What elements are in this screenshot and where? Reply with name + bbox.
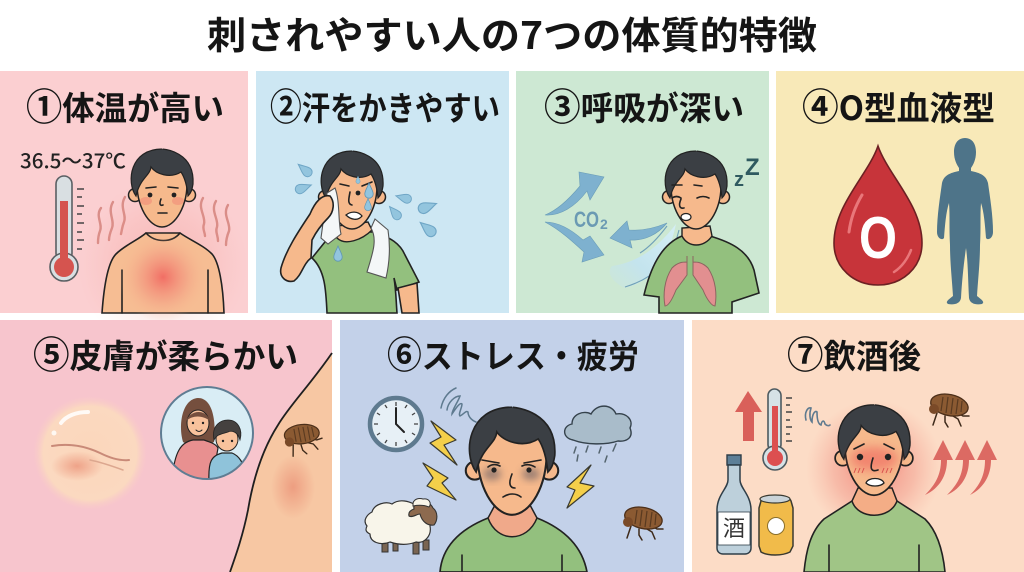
scribble xyxy=(805,408,830,426)
panel: 3 deep breathing xyxy=(516,71,769,313)
panel: 5 soft skin xyxy=(0,320,332,572)
heading 6: ⑥ストレス・疲労 xyxy=(387,325,639,379)
icon: rain cloud xyxy=(565,406,631,462)
arm with flea xyxy=(230,353,332,572)
glow behind torso xyxy=(78,180,248,350)
heading 2: ②汗をかきやすい xyxy=(270,77,500,131)
CO2 subscript: 2 xyxy=(600,216,608,232)
icon: sake bottle: 酒 xyxy=(723,516,745,541)
person flushed xyxy=(804,405,945,572)
panel: 7 after drinking xyxy=(692,320,1024,572)
heading 1: ①体温が高い xyxy=(26,77,224,131)
icon: lightning xyxy=(423,463,456,500)
silhouette xyxy=(937,138,993,304)
icon: blood drop xyxy=(834,146,922,285)
temperature label: 36.5〜37℃ xyxy=(20,145,126,174)
soft skin closeup xyxy=(33,396,147,510)
icon: sake bottle xyxy=(717,455,751,554)
heading 3: ③呼吸が深い xyxy=(544,77,744,131)
person sleeping xyxy=(644,151,759,313)
rising heat arrows xyxy=(925,440,997,495)
panel: 4 blood type O xyxy=(776,71,1024,313)
icon: lightning xyxy=(430,421,457,465)
flying sweat drops xyxy=(294,161,438,239)
neck towel xyxy=(367,219,389,278)
icon: sheep xyxy=(365,499,437,554)
icon: zZ: z xyxy=(734,169,744,191)
icon: thermometer xyxy=(763,389,792,470)
icon: flea xyxy=(929,391,970,427)
panel: 6 stress and fatigue xyxy=(340,320,684,572)
icon: lightning xyxy=(567,465,594,508)
icon: mother and child xyxy=(161,387,253,482)
heading 7: ⑦飲酒後 xyxy=(787,325,921,379)
breath arrows xyxy=(545,172,667,262)
icon: up arrow xyxy=(735,391,762,441)
icon: big Z: Z xyxy=(745,154,760,181)
title: 刺されやすい人の7つの体質的特徴 xyxy=(207,5,817,60)
heading 4: ④O型血液型 xyxy=(802,77,995,131)
icon: thermometer xyxy=(50,176,84,281)
lungs xyxy=(664,256,716,306)
CO2 label: CO xyxy=(574,207,599,232)
breath stream xyxy=(610,224,679,288)
person wiping sweat xyxy=(281,151,419,313)
heading 5: ⑤皮膚が柔らかい xyxy=(33,325,298,379)
person tired xyxy=(440,407,587,572)
arm and hand xyxy=(281,196,333,281)
scribble xyxy=(441,388,476,422)
icon: beer can xyxy=(759,495,793,555)
icon: clock xyxy=(370,398,422,450)
icon: flea xyxy=(623,504,664,540)
heat waves xyxy=(98,197,229,245)
icon: blood drop: O xyxy=(859,205,897,271)
panel: 2 sweat xyxy=(256,71,509,313)
towel on face xyxy=(321,188,341,244)
glow around face xyxy=(806,400,942,536)
person: torso xyxy=(102,149,224,322)
panel: 1 body temperature xyxy=(0,71,248,350)
